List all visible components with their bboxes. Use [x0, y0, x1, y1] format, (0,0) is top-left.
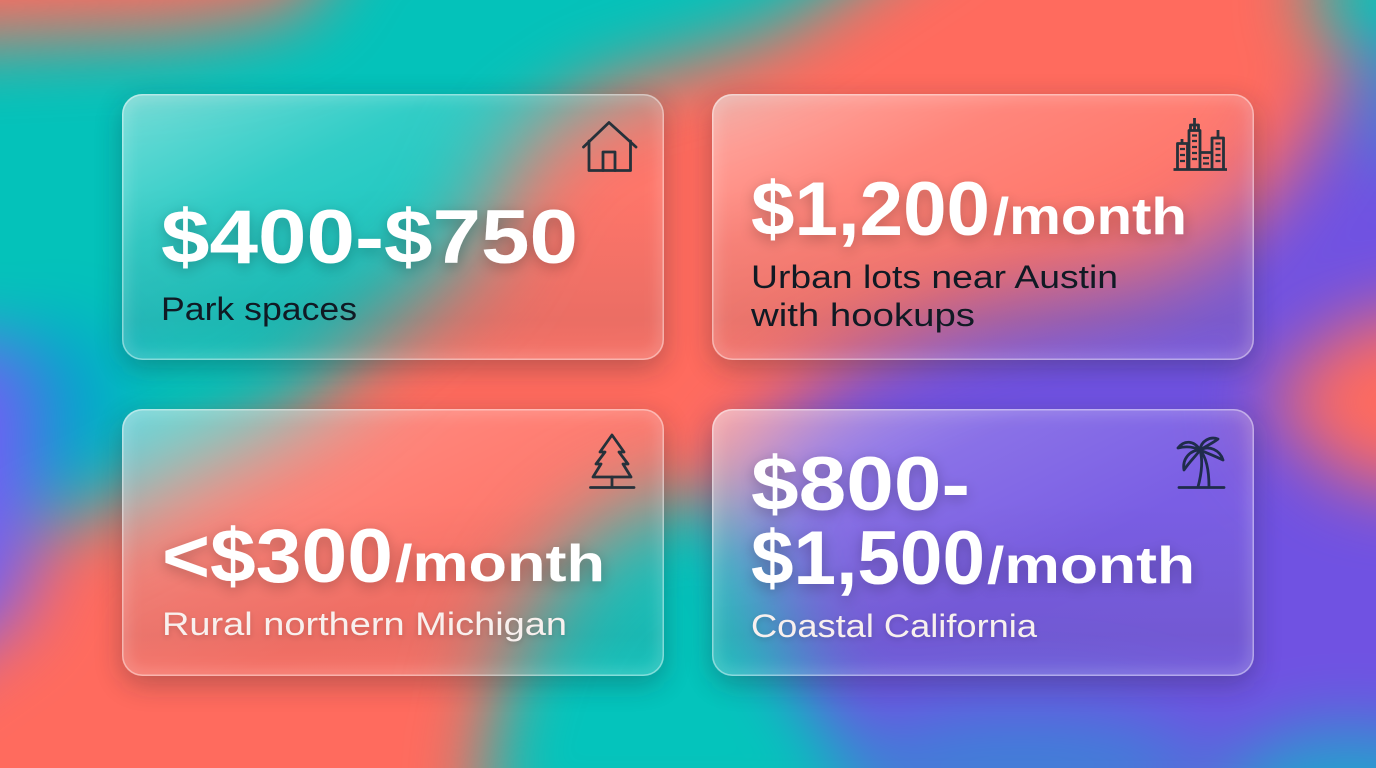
- label: coastal California: Coastal California: [751, 608, 1037, 644]
- card: park spaces: [122, 94, 664, 368]
- price: $800-$1,500/month: $1,500: [751, 516, 985, 601]
- card: rural northern Michigan: [122, 409, 664, 684]
- label: urban lots near Austin with hookups: [750, 259, 1118, 333]
- icon: city buildings: [1174, 118, 1227, 170]
- price: $800-$1,500/month: $800-: [751, 442, 970, 527]
- price: <$300/month: /month: [395, 535, 605, 593]
- card: coastal California: [712, 409, 1254, 684]
- label: urban lots near Austin with hookups: Urban lots near Austin: [751, 259, 1118, 295]
- icon: house: [584, 122, 636, 170]
- price: $1,200/month: [751, 167, 1187, 252]
- icon: palm tree: [1178, 438, 1224, 488]
- card: urban lots near Austin: [712, 94, 1254, 368]
- price: $1,200/month: $1,200: [751, 167, 990, 252]
- label: urban lots near Austin with hookups: with hookups: [750, 297, 975, 333]
- price: $800-$1,500/month: /month: [987, 537, 1195, 595]
- price: $800-$1,500/month: [751, 442, 1195, 601]
- price: <$300/month: <$300: [162, 514, 393, 599]
- price: $1,200/month: /month: [993, 188, 1187, 246]
- label: rural northern Michigan: Rural northern Michigan: [162, 606, 567, 642]
- price: $400-$750: $400-$750: [161, 195, 578, 280]
- price: <$300/month: [162, 514, 605, 599]
- label: park spaces: Park spaces: [161, 291, 357, 327]
- icon: pine tree: [590, 435, 634, 488]
